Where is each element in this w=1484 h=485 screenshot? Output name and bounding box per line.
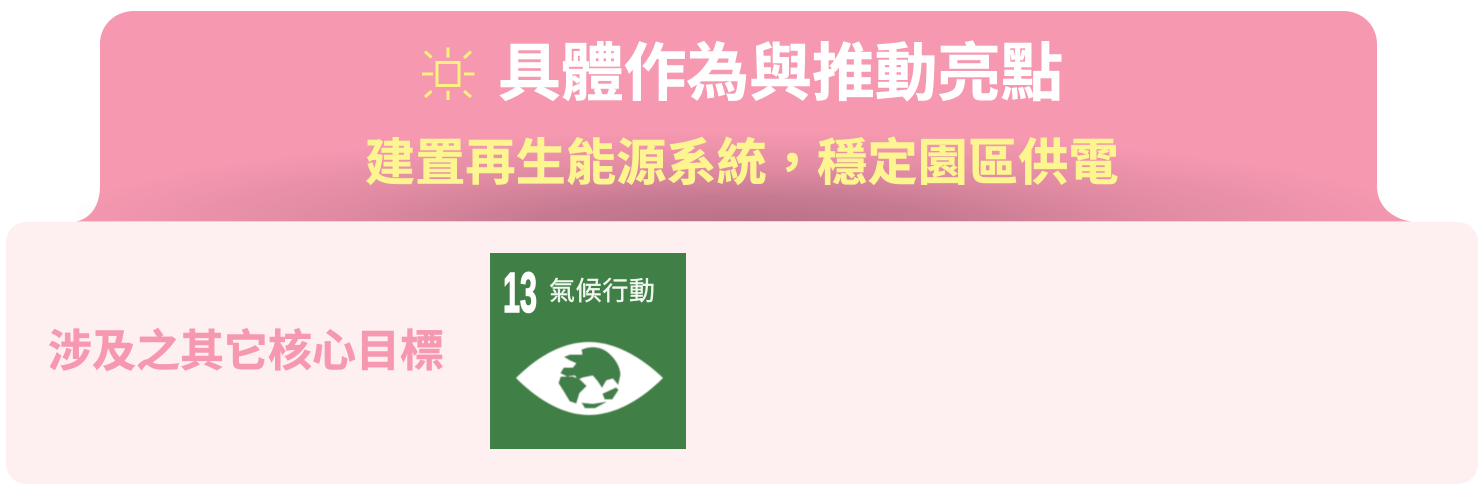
heading: title: 具體作為與推動亮點: [498, 39, 1063, 109]
label: other core goals: 涉及之其它核心目標: [48, 327, 444, 376]
icon: SDG 13 climate action: [490, 253, 686, 449]
goal number: 13: [503, 261, 537, 325]
panel: related goals: [6, 222, 1478, 484]
icon: sun: [422, 48, 474, 100]
goal name: 氣候行動: [549, 276, 655, 306]
eye with globe: [516, 342, 663, 415]
heading: subtitle: 建置再生能源系統，穩定園區供電: [365, 135, 1119, 191]
